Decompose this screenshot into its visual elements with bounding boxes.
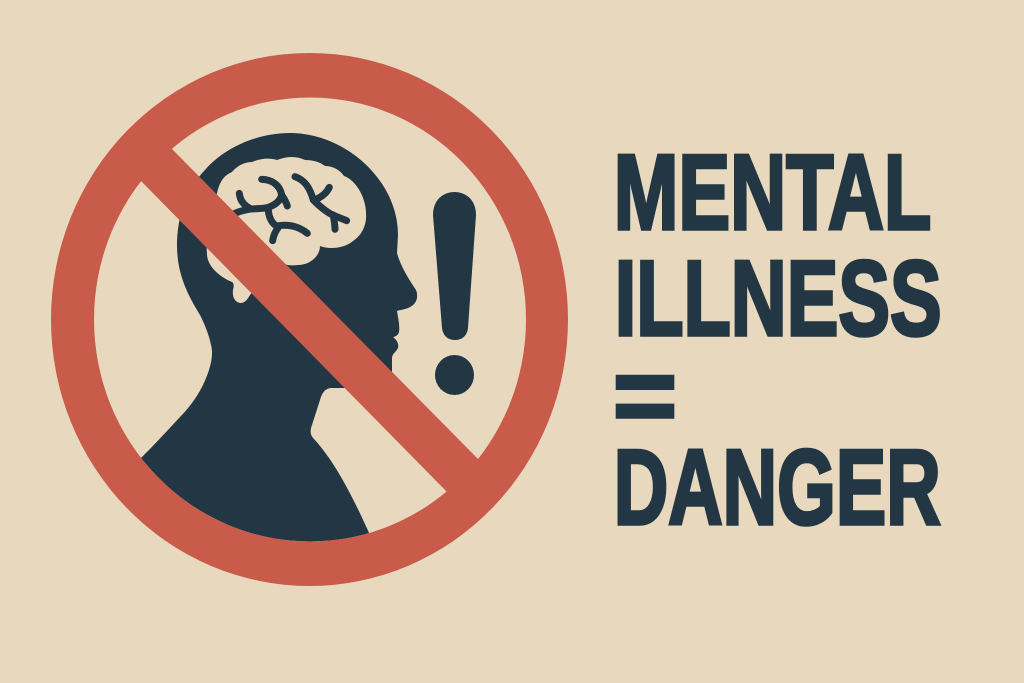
prohibition ring xyxy=(51,53,568,586)
brain folds xyxy=(235,177,347,241)
exclamation bar xyxy=(433,192,476,340)
brain outline xyxy=(207,157,366,303)
headline xyxy=(613,132,942,547)
icon: exclamation mark xyxy=(433,192,476,395)
icon: head silhouette with brain xyxy=(130,133,417,560)
icon: prohibition sign xyxy=(51,53,568,586)
exclamation dot xyxy=(435,355,474,395)
headline line: equals sign: = xyxy=(613,335,677,455)
prohibition slash xyxy=(127,134,493,507)
head silhouette xyxy=(130,133,417,560)
infographic canvas xyxy=(51,53,942,586)
